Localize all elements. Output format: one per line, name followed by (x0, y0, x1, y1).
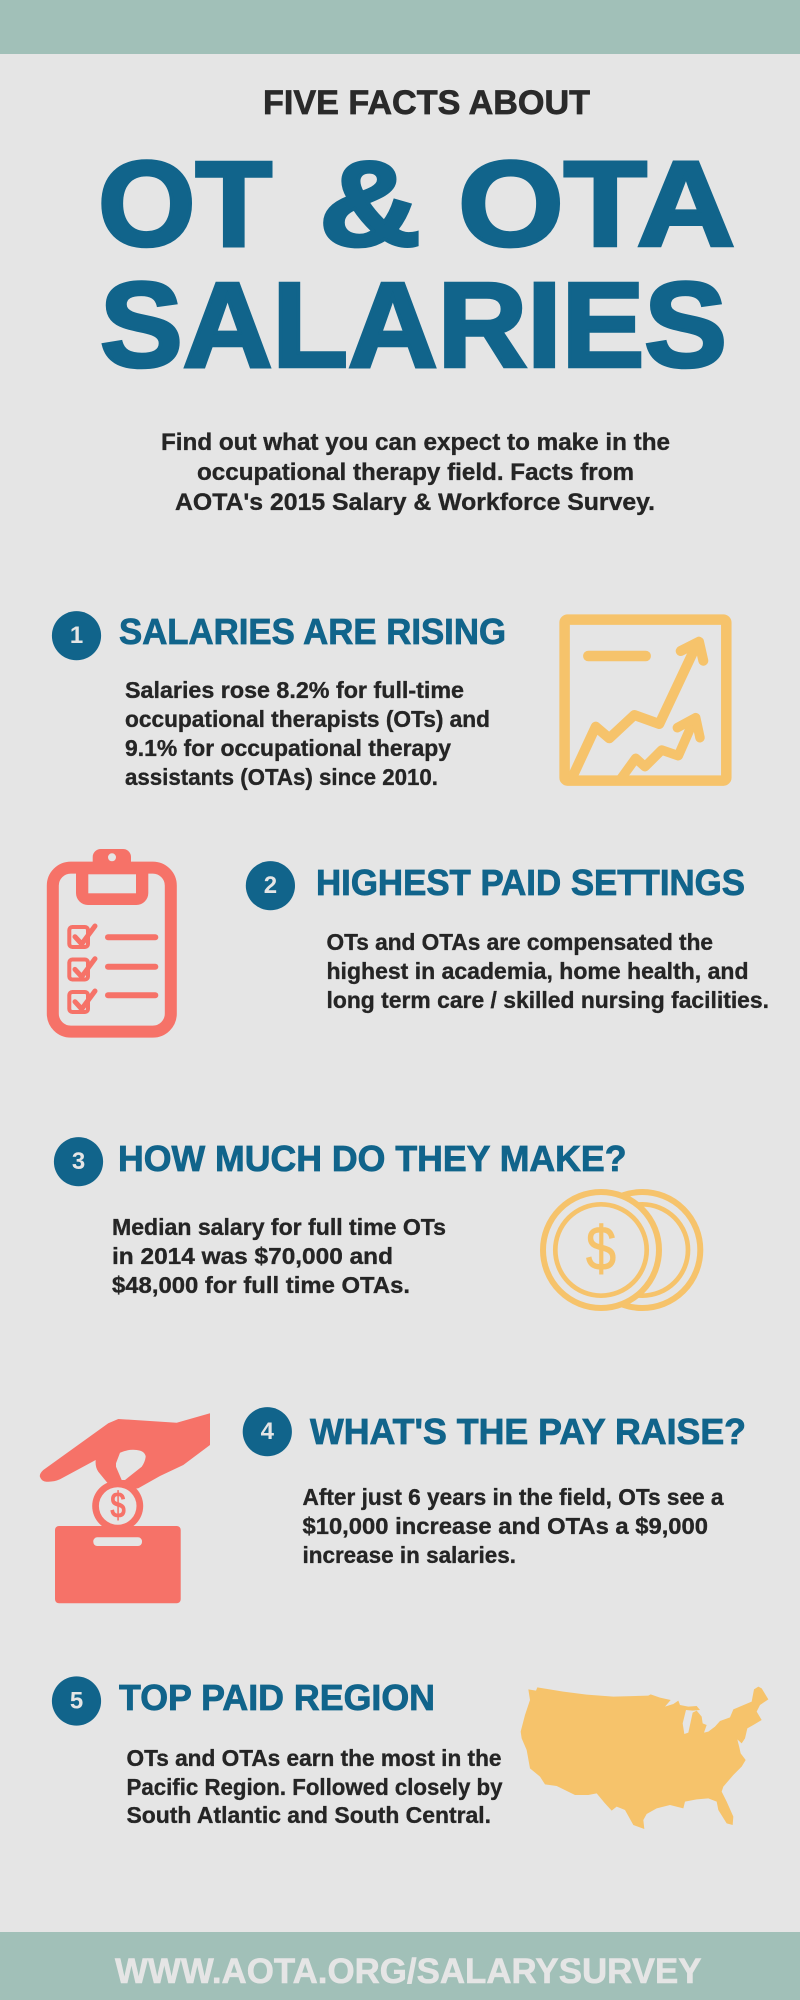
heading 3: HOW MUCH DO THEY MAKE? (118, 1138, 626, 1179)
icon: hand dropping coin into box (40, 1413, 210, 1603)
panel: fact 5 top paid region (52, 1676, 768, 1829)
number badge 5: 5 (70, 1688, 83, 1714)
intro text: occupational therapy field. Facts from (197, 459, 634, 486)
icon: clipboard checklist (53, 849, 171, 1032)
body text 1: assistants (OTAs) since 2010. (125, 764, 438, 790)
icon: map of the United States (521, 1687, 768, 1829)
body text 5 (126, 1745, 503, 1828)
body text 3 (112, 1214, 446, 1298)
main title line 1: & (319, 136, 421, 272)
number badge 4 (243, 1407, 292, 1456)
body text 1: 9.1% for occupational therapy (125, 735, 451, 761)
body text 1: occupational therapists (OTs) and (125, 706, 490, 732)
icon: rising line chart (565, 620, 726, 781)
kicker heading: FIVE FACTS ABOUT (263, 84, 590, 122)
body text 2: long term care / skilled nursing facilities. (326, 987, 769, 1013)
body text 3: in 2014 was $70,000 and (112, 1243, 393, 1269)
body text 4: increase in salaries. (302, 1542, 516, 1568)
heading 2: HIGHEST PAID SETTINGS (316, 862, 745, 903)
body text 5: Pacific Region. Followed closely by (126, 1774, 503, 1800)
intro text: AOTA's 2015 Salary & Workforce Survey. (175, 489, 655, 516)
heading 1: SALARIES ARE RISING (119, 611, 506, 652)
body text 5: South Atlantic and South Central. (126, 1802, 491, 1828)
intro text (161, 429, 670, 516)
header: title block (98, 84, 735, 392)
footer band with URL (0, 1932, 800, 2000)
body text 2: OTs and OTAs are compensated the (326, 929, 713, 955)
main title line 1: OT (98, 136, 272, 272)
number badge 2: 2 (264, 872, 277, 899)
icon: hand dropping coin into box: $ (110, 1484, 126, 1526)
body text 2: highest in academia, home health, and (326, 958, 748, 984)
number badge 5 (52, 1676, 101, 1726)
number badge 4: 4 (261, 1418, 275, 1445)
heading 5: TOP PAID REGION (119, 1677, 435, 1718)
body text 4: $10,000 increase and OTAs a $9,000 (302, 1513, 708, 1539)
top band (0, 0, 800, 54)
body text 4: After just 6 years in the field, OTs see a (302, 1484, 724, 1510)
body text 1: Salaries rose 8.2% for full-time (125, 677, 464, 703)
body text 3: $48,000 for full time OTAs. (112, 1272, 410, 1298)
icon: coins: $ (586, 1215, 616, 1284)
number badge 2 (246, 861, 295, 910)
icon: coins (543, 1192, 700, 1308)
panel: fact 2 highest paid settings (53, 849, 769, 1032)
body text 1 (125, 677, 490, 790)
body text 3: Median salary for full time OTs (112, 1214, 446, 1240)
intro text: Find out what you can expect to make in the (161, 429, 670, 456)
number badge 1: 1 (70, 622, 83, 649)
panel: fact 3 how much do they make (54, 1137, 700, 1308)
number badge 3: 3 (72, 1148, 85, 1175)
panel: fact 4 pay raise (40, 1407, 746, 1603)
body text 4 (302, 1484, 724, 1568)
body text 5: OTs and OTAs earn the most in the (126, 1745, 502, 1771)
main title line 1 (98, 136, 735, 272)
footer band with URL: WWW.AOTA.ORG/SALARYSURVEY (115, 1952, 702, 1991)
heading 4: WHAT'S THE PAY RAISE? (310, 1411, 746, 1452)
main title line 1: OTA (458, 136, 735, 272)
number badge 3 (54, 1137, 103, 1186)
number badge 1 (52, 611, 101, 660)
main title line 2: SALARIES (100, 256, 727, 392)
body text 2 (326, 929, 769, 1013)
panel: fact 1 salaries are rising (52, 611, 726, 790)
